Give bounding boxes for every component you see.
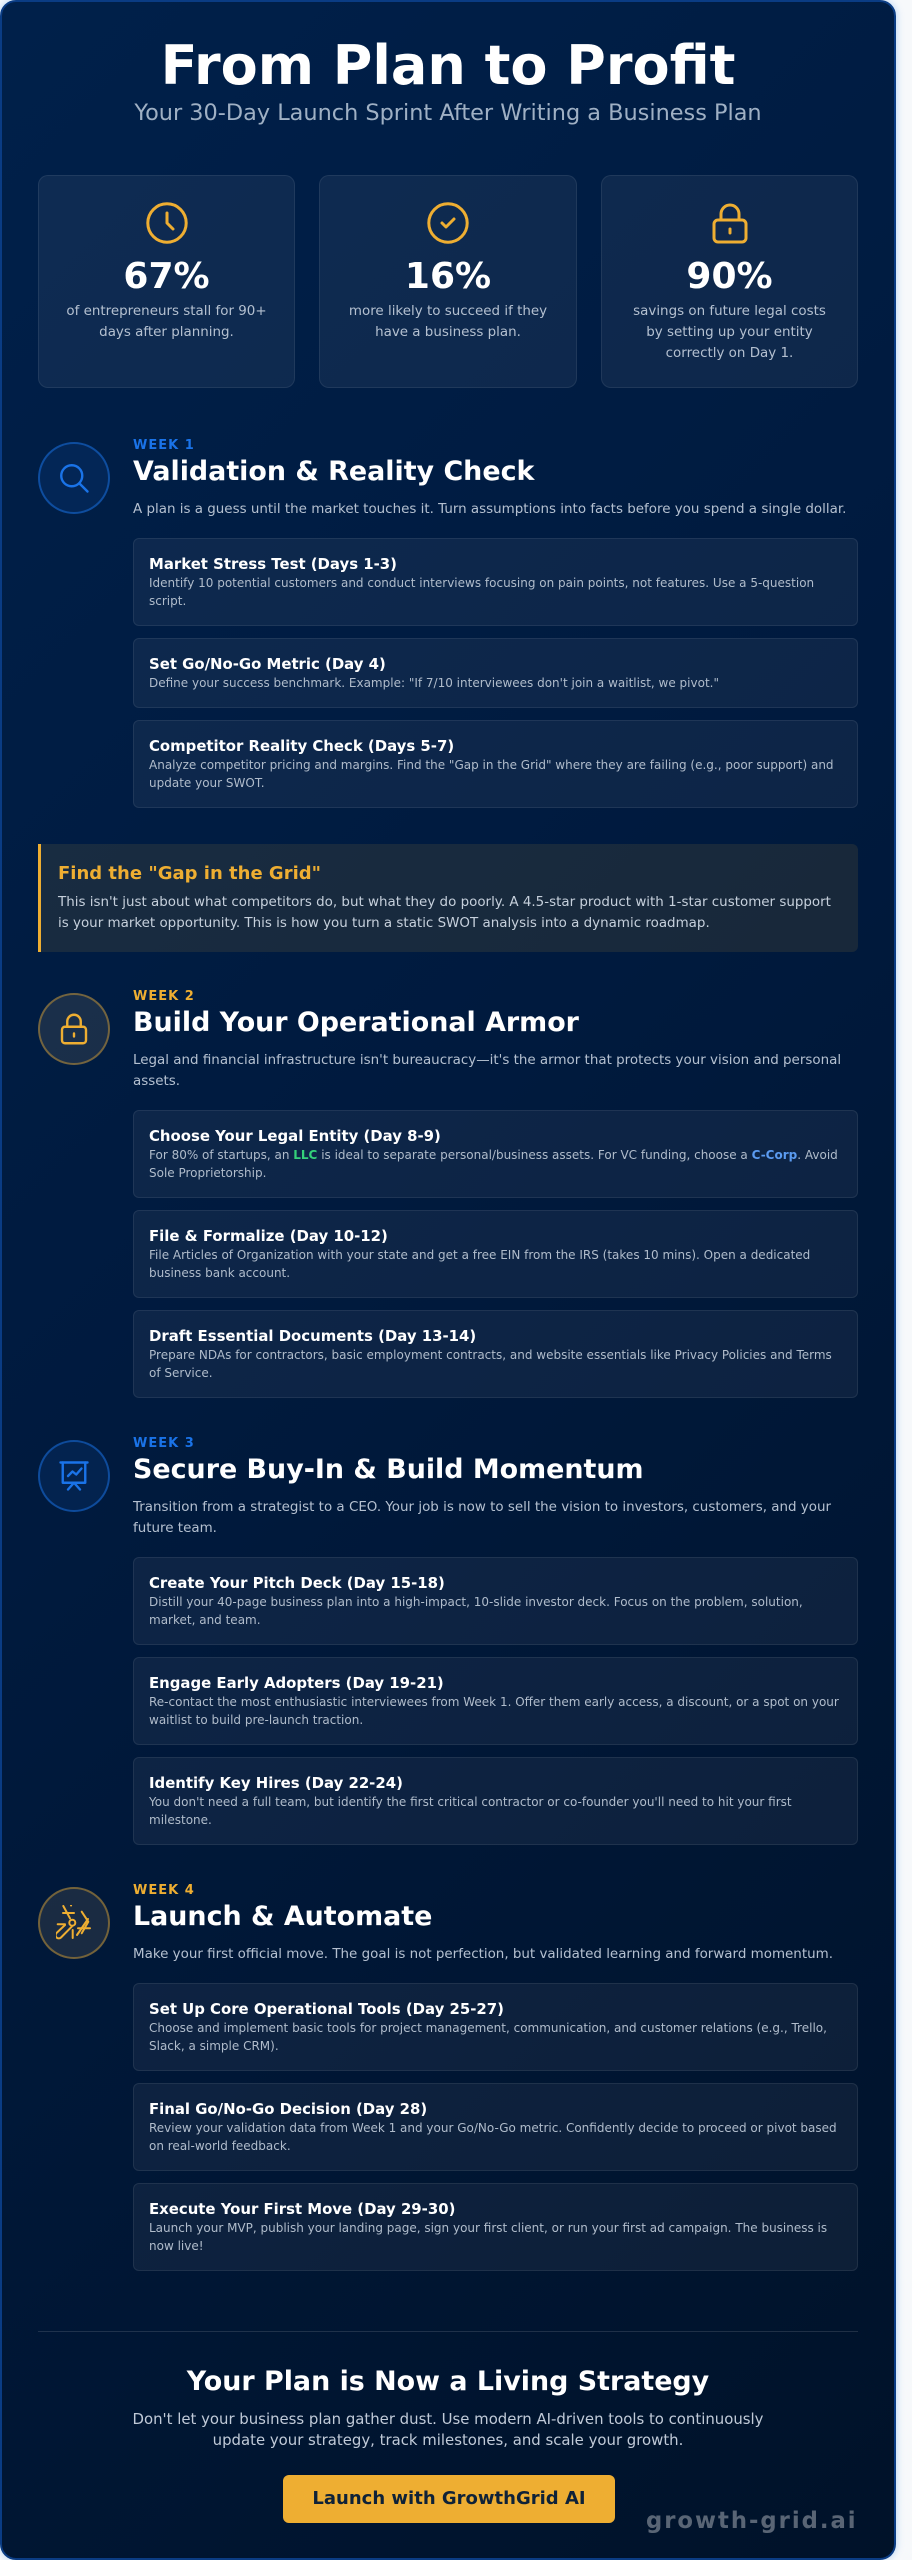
stat value: 67% — [123, 256, 210, 297]
task: early adopters — [133, 1657, 858, 1745]
stat value: 16% — [405, 256, 491, 297]
week heading: Secure Buy-In & Build Momentum — [133, 1454, 644, 1485]
panel: week 4 — [38, 1883, 858, 2271]
task: go/no-go metric: Define your success benchmark. Example: "If 7/10 interviewees don't join a waitlist, we pivot." — [149, 676, 719, 690]
week description: Make your first official move. The goal is not perfection, but validated learning and forward momentum. — [133, 1947, 833, 1962]
closing heading: Your Plan is Now a Living Strategy — [187, 2366, 709, 2397]
task: essential documents: Draft Essential Documents (Day 13-14) — [149, 1327, 476, 1345]
watermark: growth-grid.ai — [646, 2508, 858, 2534]
week label: WEEK 4 — [133, 1883, 195, 1898]
callout heading: Find the "Gap in the Grid" — [58, 863, 321, 884]
week heading: Validation & Reality Check — [133, 456, 534, 487]
stat label: savings on future legal costs by setting up your entity correctly on Day 1. — [633, 304, 826, 361]
stat label: more likely to succeed if they have a business plan. — [349, 304, 547, 340]
task: legal entity: For 80% of startups, an LLC is ideal to separate personal/business assets. For VC funding, choose a C-Corp. Avoid Sole Proprietorship. — [149, 1148, 838, 1180]
task: pitch deck: Distill your 40-page business plan into a high-impact, 10-slide investor deck. Focus on the problem, solution, market, and team. — [149, 1595, 803, 1627]
stat value: 90% — [686, 256, 773, 297]
icon: padlock — [712, 204, 748, 244]
task: pitch deck: Create Your Pitch Deck (Day 15-18) — [149, 1574, 445, 1592]
task: legal entity — [133, 1110, 858, 1198]
task: key hires — [133, 1757, 858, 1845]
icon: magnifying glass — [38, 442, 110, 514]
panel: week 3 — [38, 1436, 858, 1845]
stat card: 90% — [601, 175, 858, 388]
callout: gap in the grid — [38, 844, 858, 952]
week description: A plan is a guess until the market touches it. Turn assumptions into facts before you spend a single dollar. — [133, 502, 846, 517]
task: go/no-go metric — [133, 638, 858, 708]
task: essential documents — [133, 1310, 858, 1398]
week heading: Build Your Operational Armor — [133, 1007, 579, 1038]
task: competitor check: Analyze competitor pricing and margins. Find the "Gap in the Grid" where they are failing (e.g., poor support) and update your SWOT. — [149, 758, 834, 790]
task: operational tools — [133, 1983, 858, 2071]
task: final decision — [133, 2083, 858, 2171]
week description: Legal and financial infrastructure isn't bureaucracy—it's the armor that protects your vision and personal assets. — [133, 1053, 841, 1089]
button: launch — [283, 2475, 615, 2523]
task: file and formalize: File Articles of Organization with your state and get a free EIN from the IRS (takes 10 mins). Open a dedicated business bank account. — [149, 1248, 810, 1280]
task: final decision: Review your validation data from Week 1 and your Go/No-Go metric. Confidently decide to proceed or pivot based on real-world feedback. — [149, 2121, 837, 2153]
panel: week 1 — [38, 438, 858, 808]
task: legal entity: Choose Your Legal Entity (Day 8-9) — [149, 1127, 441, 1145]
week heading: Launch & Automate — [133, 1901, 432, 1932]
icon: rocket — [38, 1887, 110, 1959]
stat label: of entrepreneurs stall for 90+ days after planning. — [66, 304, 267, 340]
title: From Plan to Profit — [161, 34, 735, 97]
panel: week 2 — [38, 989, 858, 1398]
task: competitor check: Competitor Reality Check (Days 5-7) — [149, 737, 454, 755]
subtitle: Your 30-Day Launch Sprint After Writing a Business Plan — [134, 100, 762, 126]
task: first move — [133, 2183, 858, 2271]
task: competitor check — [133, 720, 858, 808]
week label: WEEK 1 — [133, 438, 195, 453]
task: first move: Launch your MVP, publish your landing page, sign your first client, or run your first ad campaign. The business is now live! — [149, 2221, 827, 2253]
task: early adopters: Engage Early Adopters (Day 19-21) — [149, 1674, 444, 1692]
task: first move: Execute Your First Move (Day 29-30) — [149, 2200, 455, 2218]
task: operational tools: Set Up Core Operational Tools (Day 25-27) — [149, 2000, 504, 2018]
week label: WEEK 2 — [133, 989, 195, 1004]
icon: padlock — [38, 993, 110, 1065]
button: launch: Launch with GrowthGrid AI — [312, 2488, 586, 2509]
task: go/no-go metric: Set Go/No-Go Metric (Day 4) — [149, 655, 386, 673]
icon: check circle — [427, 202, 469, 244]
task: early adopters: Re-contact the most enthusiastic interviewees from Week 1. Offer them early access, a discount, or a spot on your waitlist to build pre-launch traction. — [149, 1695, 839, 1727]
task: market stress test: Market Stress Test (Days 1-3) — [149, 555, 397, 573]
task: key hires: You don't need a full team, but identify the first critical contractor or co-founder you'll need to hit your first milestone. — [149, 1795, 792, 1827]
task: key hires: Identify Key Hires (Day 22-24) — [149, 1774, 403, 1792]
task: final decision: Final Go/No-Go Decision (Day 28) — [149, 2100, 427, 2118]
stat card: 16% — [319, 175, 577, 388]
week label: WEEK 3 — [133, 1436, 195, 1451]
task: file and formalize: File & Formalize (Day 10-12) — [149, 1227, 388, 1245]
task: market stress test: Identify 10 potential customers and conduct interviews focusing on pain points, not features. Use a 5-question script. — [149, 576, 814, 608]
task: file and formalize — [133, 1210, 858, 1298]
callout text: This isn't just about what competitors do, but what they do poorly. A 4.5-star product with 1-star customer support is your market opportunity. This is how you turn a static SWOT analysis into a dynamic roadmap. — [58, 895, 831, 931]
task: market stress test — [133, 538, 858, 626]
task: pitch deck — [133, 1557, 858, 1645]
task: essential documents: Prepare NDAs for contractors, basic employment contracts, and website essentials like Privacy Policies and Terms of Service. — [149, 1348, 832, 1380]
task: operational tools: Choose and implement basic tools for project management, communication, and customer relations (e.g., Trello, Slack, a simple CRM). — [149, 2021, 827, 2053]
closing text: Don't let your business plan gather dust. Use modern AI-driven tools to continuously update your strategy, track milestones, and scale your growth. — [133, 2410, 763, 2449]
stat card: 67% — [38, 175, 295, 388]
icon: clock — [146, 202, 188, 244]
week description: Transition from a strategist to a CEO. Your job is now to sell the vision to investors, customers, and your future team. — [133, 1500, 831, 1536]
icon: presentation chart — [38, 1440, 110, 1512]
